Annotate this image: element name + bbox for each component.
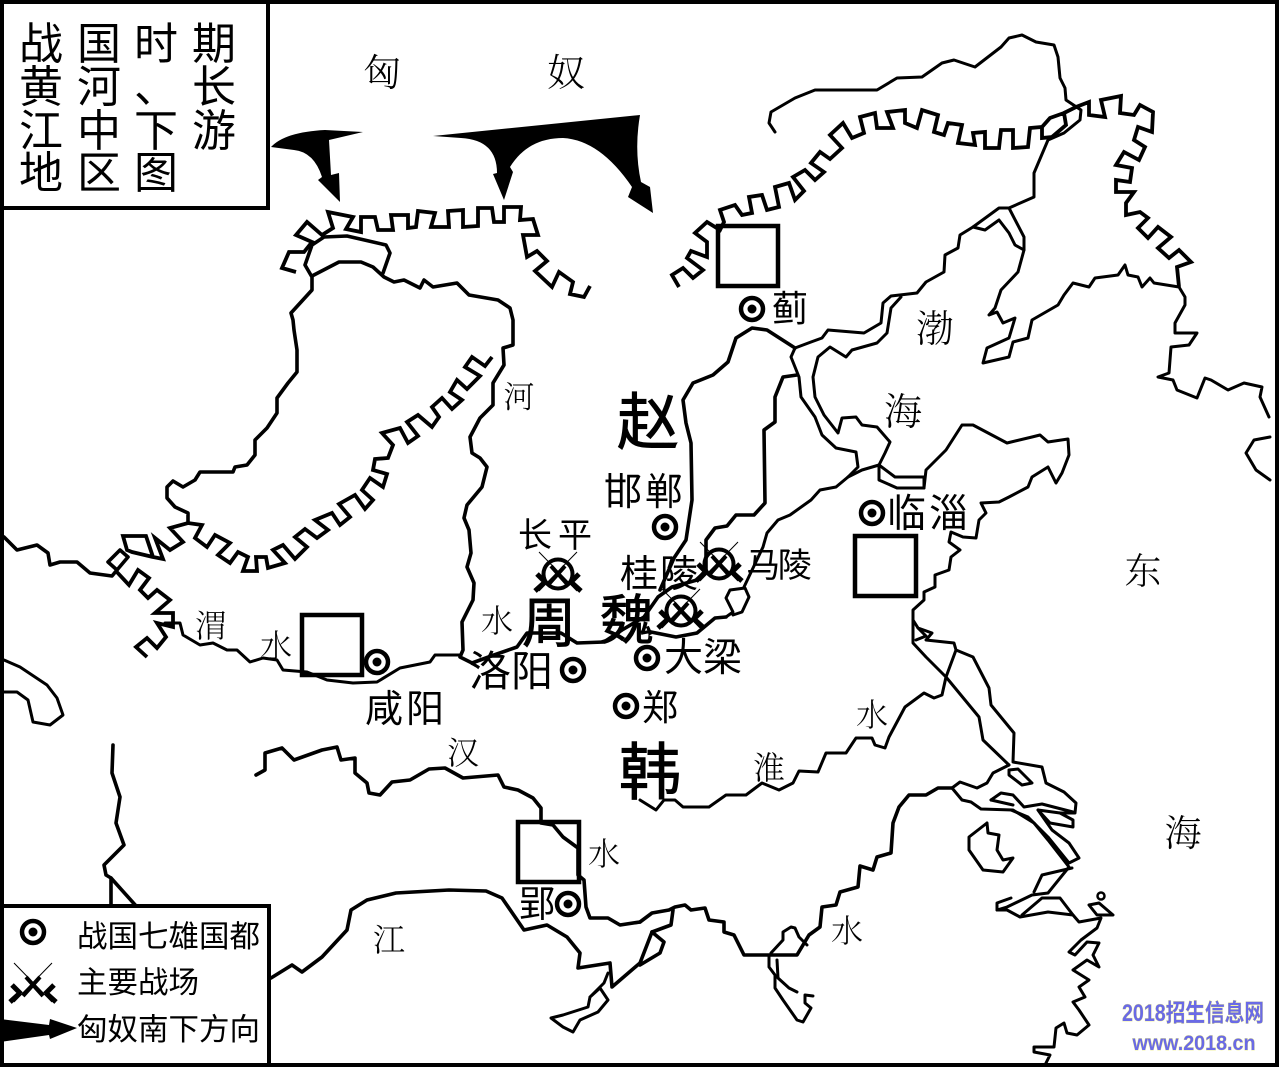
- title: 江中下游: [19, 107, 236, 156]
- label: East Sea: 海: [1164, 814, 1202, 855]
- title: [19, 20, 236, 198]
- label: Han river: 水: [588, 836, 620, 872]
- capital marker: Luoyang: [562, 659, 584, 681]
- title: 地区图: [19, 149, 178, 198]
- battle marker: Maling: [696, 542, 742, 581]
- label: Maling: 马 陵: [746, 547, 811, 585]
- capital state square: Yan: [718, 226, 778, 286]
- label: river He water: 水: [481, 603, 513, 639]
- capital marker: Linzi: [861, 502, 883, 524]
- label: Xiongnu: 匈: [363, 53, 401, 95]
- capital marker: Ying: [557, 893, 579, 915]
- label: Wei river: 水: [260, 628, 292, 664]
- capital state square: Qin: [302, 615, 362, 675]
- label: Bohai: 渤: [916, 309, 954, 351]
- Huai River: [640, 650, 956, 810]
- capital marker: Ji: [741, 298, 763, 320]
- capital state square: Qi: [855, 536, 916, 596]
- label: Yangtze: 水: [831, 913, 863, 949]
- lakes: [551, 927, 813, 1032]
- label: Xiongnu: 奴: [547, 53, 585, 95]
- label: Han: 韩: [619, 739, 681, 808]
- arrow: Xiongnu centre and east: [433, 115, 653, 213]
- panel: title: [2, 2, 268, 208]
- label: Bohai: 海: [884, 392, 922, 434]
- label: East Sea: 东: [1124, 552, 1162, 593]
- legend: battlefield: 主要战场: [77, 966, 199, 1000]
- label: Guiling: 桂陵: [620, 554, 700, 596]
- label: Zheng: 郑: [642, 687, 678, 728]
- Great Wall: [115, 96, 1191, 657]
- label: East Sea: [1124, 552, 1202, 855]
- label: Yangtze: 江: [373, 922, 405, 958]
- legend: capital: 战国七雄国都: [77, 920, 260, 954]
- label: Huai river: 水: [856, 697, 888, 733]
- label: Wei river: [195, 608, 292, 664]
- label: Wei: 魏: [600, 591, 654, 651]
- label: Zhou: 周: [522, 594, 576, 654]
- capital state square: Chu: [518, 822, 579, 882]
- Liao coast: [769, 35, 1081, 208]
- wall: east section: [672, 110, 1066, 287]
- title: 黄河、长: [19, 63, 236, 112]
- label: Yangtze: [373, 913, 863, 958]
- label: Ying: 郢: [518, 884, 556, 925]
- Bohai and Yellow Sea coastline: [726, 208, 1270, 827]
- watermark: [1122, 1000, 1264, 1055]
- legend: Xiongnu arrow: 匈奴南下方向: [77, 1013, 260, 1047]
- Yangtze delta: [952, 765, 1113, 1063]
- wall: north section: [282, 207, 590, 297]
- capital marker: Zheng: [615, 695, 637, 717]
- label: Han river: 汉: [447, 735, 479, 771]
- capital marker: Xianyang: [366, 651, 388, 673]
- Wei River: [165, 623, 460, 683]
- label: Changping: 长平: [518, 517, 598, 555]
- label: Luoyang: 洛阳: [469, 648, 553, 695]
- capital marker: Daliang: [636, 647, 658, 669]
- watermark: www.2018.cn: [1132, 1032, 1256, 1055]
- label: Handan: 邯郸: [604, 472, 686, 514]
- label: Huai river: [753, 697, 888, 786]
- arrow: Xiongnu west: [271, 130, 363, 202]
- title: 战国时期: [19, 20, 236, 69]
- label: He: 河: [504, 380, 534, 415]
- label: Ji: 蓟: [772, 288, 808, 329]
- label: Huai river: 淮: [753, 750, 785, 786]
- label: Bohai: [884, 309, 954, 434]
- label: Daliang: 大梁: [664, 637, 742, 680]
- Han River: [256, 747, 640, 925]
- Yellow River: [4, 236, 797, 663]
- wall: west section: [123, 357, 492, 571]
- label: Zhao: 赵: [617, 389, 679, 458]
- capital marker: Handan: [654, 516, 676, 538]
- battle marker: Guiling: [658, 589, 704, 628]
- Yangtze River: [4, 660, 952, 987]
- label: Xiongnu: [363, 53, 585, 95]
- wall: north-east section: [1064, 96, 1191, 287]
- label: Xianyang: 咸阳: [365, 689, 447, 731]
- label: Wei river: 渭: [195, 608, 227, 644]
- battle marker: Changping: [535, 552, 581, 591]
- legend: battlefield: [10, 963, 199, 1002]
- label: Han river: [447, 735, 620, 872]
- panel: legend: [0, 906, 269, 1065]
- label: Linzi: 临淄: [887, 493, 971, 536]
- wall: south-west section: [115, 570, 173, 657]
